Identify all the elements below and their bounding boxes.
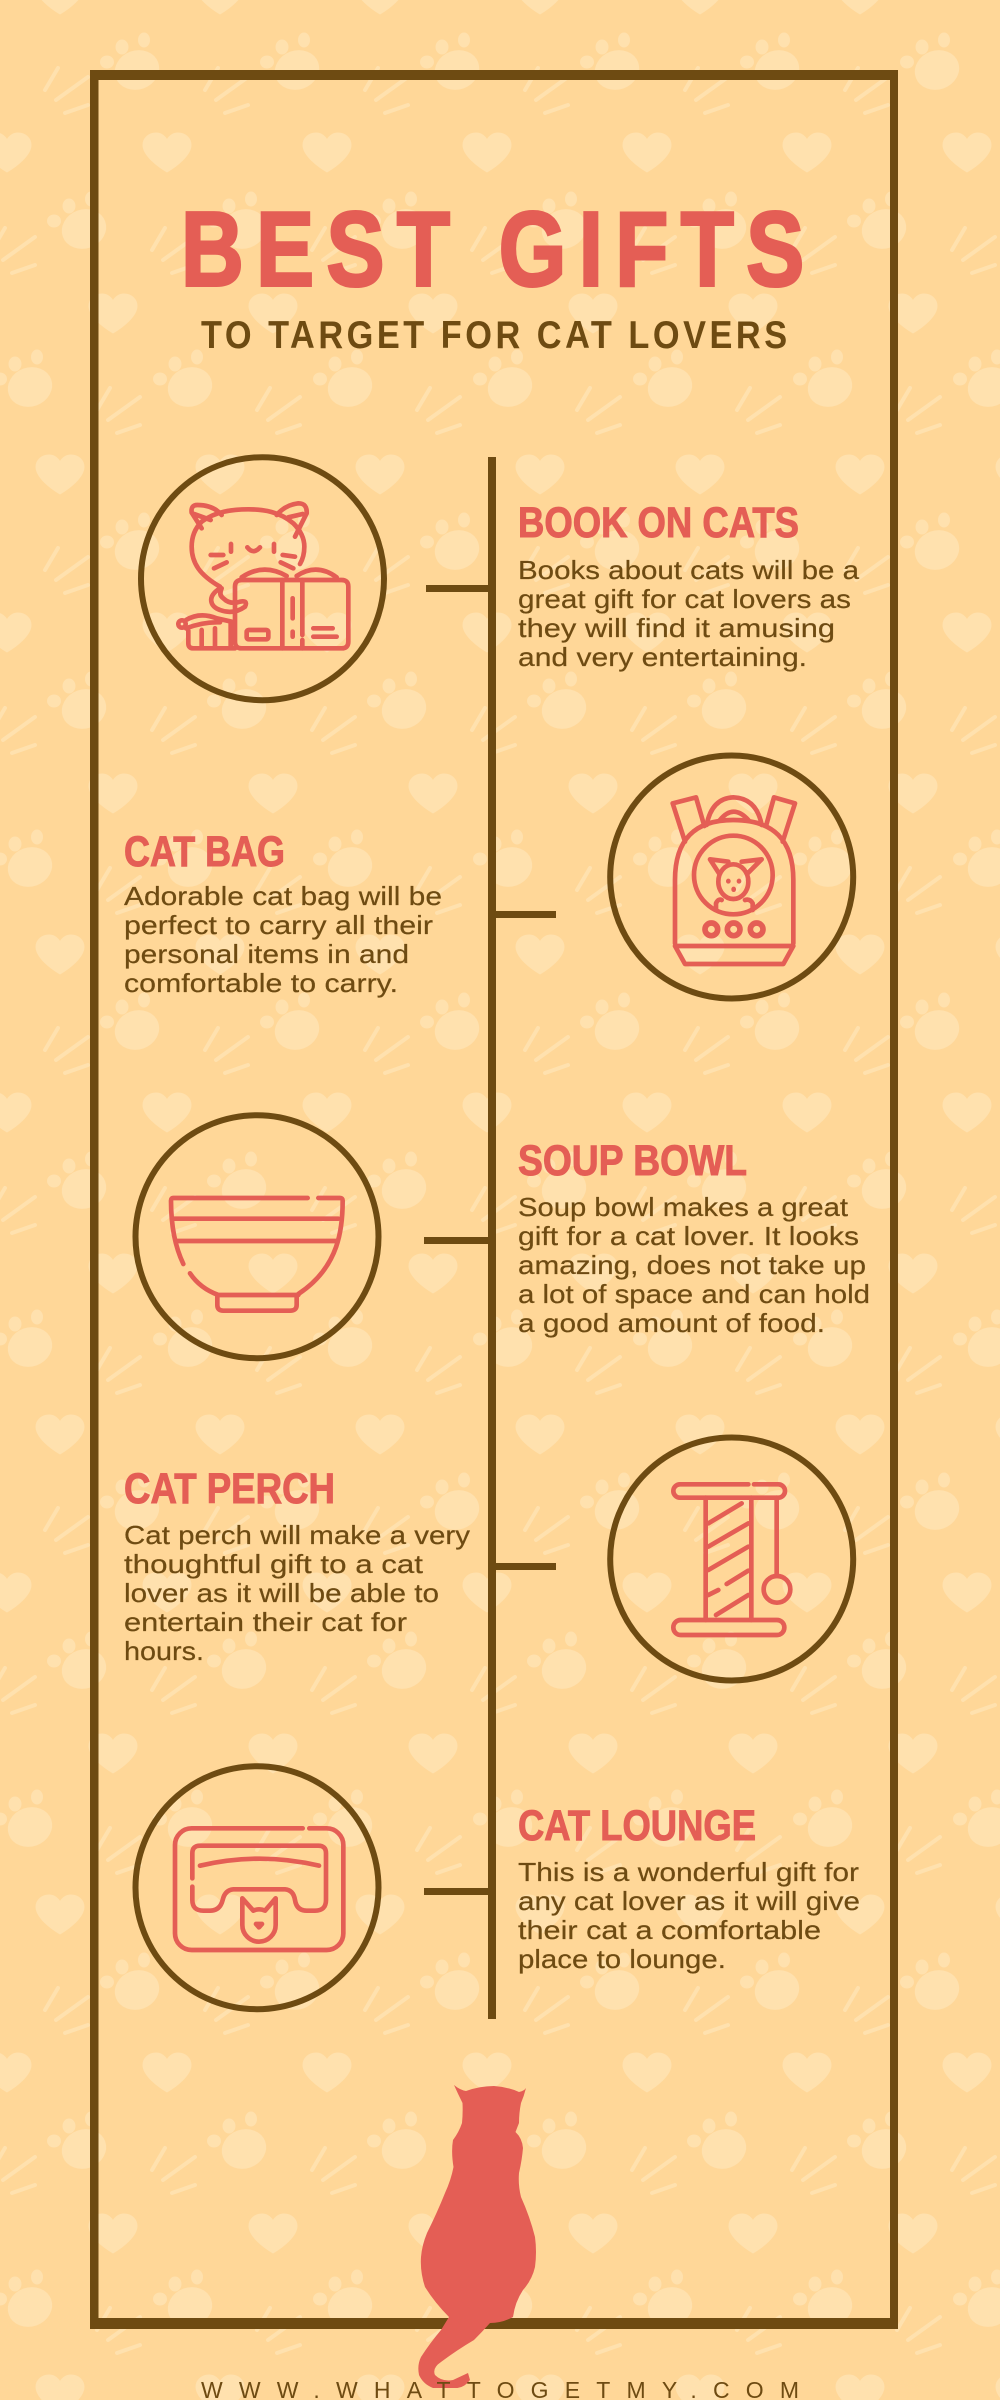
body text: Soup bowl makes a great (518, 1192, 849, 1222)
circle (136, 1115, 378, 1358)
heading: BOOK ON CATS (518, 499, 799, 547)
body text: any cat lover as it will give (518, 1886, 860, 1916)
body text: great gift for cat lovers as (518, 584, 851, 614)
connector (424, 1888, 489, 1895)
body text: and very entertaining. (518, 642, 807, 672)
body text: gift for a cat lover. It looks (518, 1221, 859, 1251)
body text: amazing, does not take up (518, 1250, 866, 1280)
body text: hours. (124, 1636, 204, 1666)
frame border (90, 70, 898, 2329)
body text (518, 1857, 860, 1974)
icon: cat backpack (673, 797, 795, 964)
body text: a good amount of food. (518, 1308, 825, 1338)
body text: Cat perch will make a very (124, 1520, 470, 1550)
connector (495, 1563, 556, 1570)
title: BEST GIFTS (181, 189, 804, 308)
cat silhouette (418, 2085, 536, 2388)
body text: thoughtful gift to a cat (124, 1549, 424, 1579)
connector (426, 585, 489, 592)
circle (610, 1438, 853, 1680)
subtitle: TO TARGET FOR CAT LOVERS (201, 313, 787, 356)
body text (124, 1520, 470, 1666)
body text: Books about cats will be a (518, 555, 860, 585)
body text (518, 555, 860, 672)
body text (518, 1192, 870, 1338)
body text: perfect to carry all their (124, 910, 433, 940)
item: cat lounge (136, 1766, 860, 2009)
item: cat perch (124, 1438, 853, 1680)
body text: comfortable to carry. (124, 968, 398, 998)
body text: entertain their cat for (124, 1607, 407, 1637)
body text (124, 881, 442, 998)
circle (610, 756, 853, 998)
body text: Adorable cat bag will be (124, 881, 442, 911)
icon: scratching post (673, 1484, 790, 1635)
icon: cat with book (178, 503, 348, 648)
heading: CAT LOUNGE (518, 1802, 756, 1850)
item: cat bag (124, 756, 853, 998)
body text: place to lounge. (518, 1944, 726, 1974)
icon: bowl (171, 1198, 343, 1311)
icon: cat lounge bed (175, 1828, 343, 1950)
heading: CAT BAG (124, 828, 285, 876)
circle (136, 1766, 378, 2009)
timeline vertical line (488, 457, 496, 2019)
body text: This is a wonderful gift for (518, 1857, 859, 1887)
connector (495, 911, 556, 918)
body text: a lot of space and can hold (518, 1279, 870, 1309)
item: book on cats (141, 457, 860, 700)
body text: they will find it amusing (518, 613, 835, 643)
heading: CAT PERCH (124, 1465, 335, 1513)
body text: lover as it will be able to (124, 1578, 439, 1608)
item: soup bowl (136, 1115, 870, 1358)
circle (141, 457, 384, 700)
connector (424, 1237, 489, 1244)
heading: SOUP BOWL (518, 1137, 747, 1185)
body text: personal items in and (124, 939, 409, 969)
body text: their cat a comfortable (518, 1915, 821, 1945)
